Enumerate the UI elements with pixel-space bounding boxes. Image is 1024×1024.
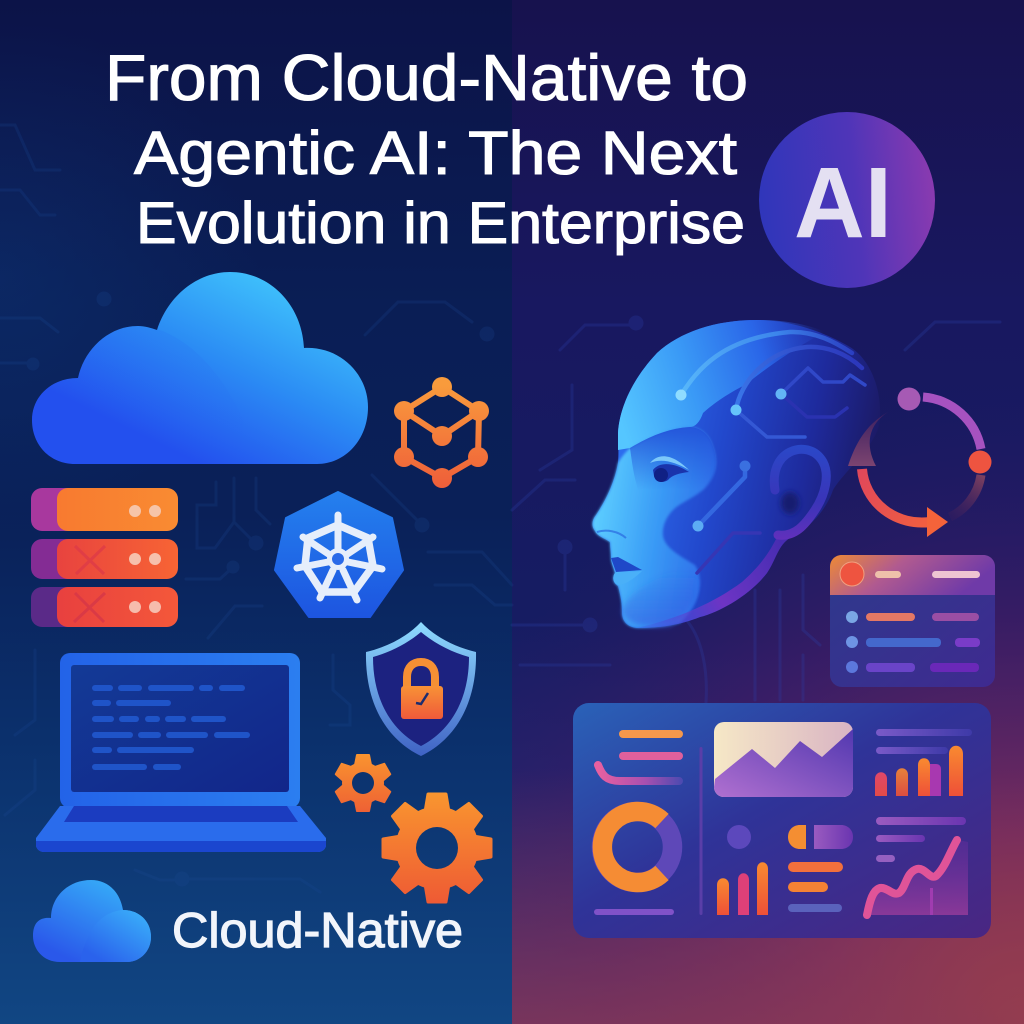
- icon: large cloud: [32, 272, 368, 464]
- icon: large gear: [382, 792, 492, 904]
- title: Evolution in Enterprise: [136, 191, 745, 256]
- head silhouette: [592, 320, 880, 628]
- icon: network cube: [394, 377, 489, 488]
- list lines and curve: [598, 730, 683, 781]
- eye: [650, 456, 689, 482]
- line chart: [865, 840, 968, 915]
- AI badge: [759, 112, 935, 288]
- icon: laptop: [36, 653, 326, 852]
- background: left panel: [0, 0, 512, 1024]
- icon: shield with lock: [366, 622, 476, 756]
- ear: [774, 449, 826, 535]
- donut chart: [602, 812, 672, 882]
- lower face light: [592, 427, 716, 628]
- forehead light: [618, 320, 825, 450]
- side lines: [876, 817, 966, 862]
- padlock: [401, 662, 443, 719]
- chin shading: [622, 565, 697, 627]
- nostril line: [597, 531, 626, 538]
- list pills: [788, 862, 843, 912]
- icon: small gear: [334, 754, 392, 812]
- caption line: [594, 909, 674, 915]
- bar chart bottom: [717, 862, 768, 915]
- header lines: [876, 729, 972, 754]
- icon: kubernetes wheel: [275, 492, 403, 617]
- circuit pattern background: [0, 125, 512, 892]
- circuit nodes: [676, 388, 786, 532]
- bar chart top: [875, 746, 963, 796]
- title: Agentic AI: The Next: [134, 119, 737, 187]
- dot and pill: [727, 825, 853, 849]
- server row 3: [31, 587, 178, 627]
- title: [105, 41, 748, 256]
- circuit traces on head: [681, 332, 865, 573]
- lips: [611, 557, 642, 585]
- server row 1: [31, 488, 178, 531]
- divider: [700, 747, 702, 915]
- icon: agent loop arrows: [848, 388, 992, 537]
- area chart: [714, 722, 853, 797]
- panel: agent card: [830, 555, 995, 687]
- card rows: [846, 611, 980, 673]
- brow shading: [630, 427, 716, 495]
- jaw rim: [637, 535, 790, 628]
- background: right panel: [512, 0, 1024, 1024]
- icon: server stack: [31, 488, 178, 627]
- code lines: [92, 685, 250, 770]
- title: From Cloud-Native to: [105, 41, 748, 114]
- panel: analytics dashboard: [573, 703, 991, 938]
- server row 2: [31, 539, 178, 579]
- icon: small cloud: [33, 880, 151, 962]
- AI badge: AI: [794, 147, 892, 259]
- icon: AI head: [592, 320, 880, 628]
- circuit pattern right side: [512, 317, 1000, 702]
- label: Cloud-Native: Cloud-Native: [172, 904, 463, 958]
